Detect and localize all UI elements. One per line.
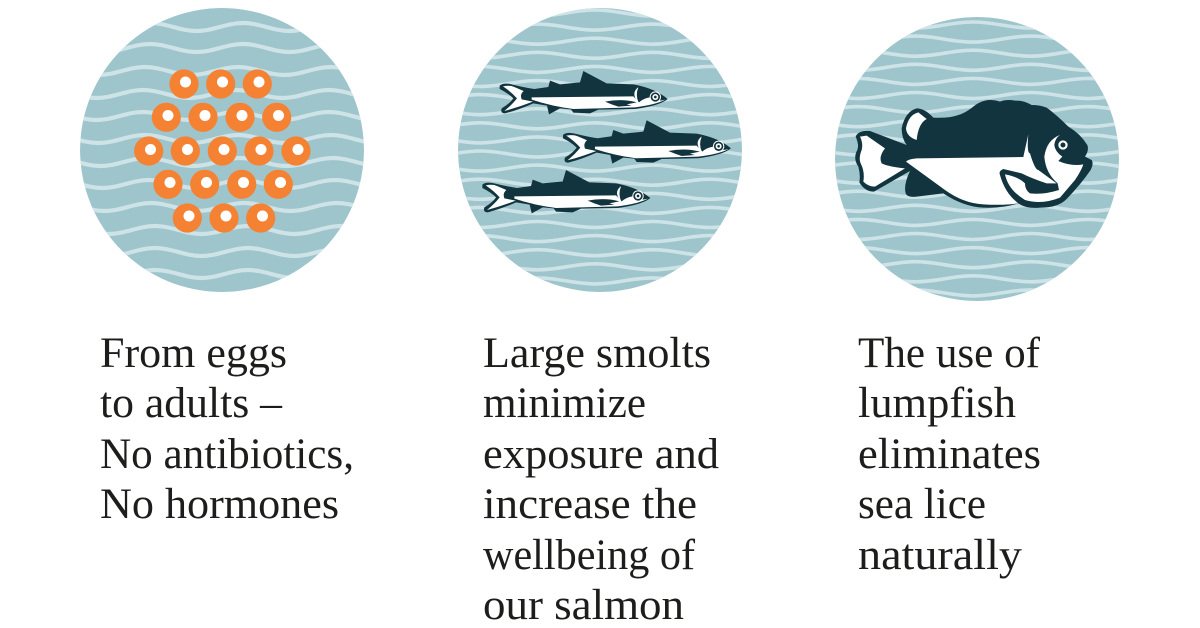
water circle: smolts [458, 8, 742, 292]
text: eggs caption: No hormones [100, 481, 339, 528]
text: smolts caption: wellbeing of [483, 532, 696, 579]
text: lumpfish caption [858, 330, 1041, 579]
text: smolts caption: exposure and [483, 431, 719, 478]
icon: middle smolt [563, 120, 731, 164]
icon: lumpfish [855, 100, 1093, 208]
text: eggs caption: From eggs [100, 330, 287, 377]
text: smolts caption: our salmon [483, 582, 684, 628]
water circle: eggs [80, 8, 364, 292]
text: smolts caption: minimize [483, 380, 646, 427]
text: smolts caption: Large smolts [483, 330, 711, 377]
icon: top smolt [500, 71, 668, 114]
panel: smolts badge [458, 8, 742, 292]
water circle: lumpfish [835, 17, 1119, 301]
text: eggs caption [100, 330, 354, 528]
text: smolts caption: increase the [483, 481, 697, 528]
text: lumpfish caption: lumpfish [858, 380, 1016, 427]
icon: salmon eggs cluster [134, 69, 311, 233]
icon: bottom smolt [482, 170, 650, 213]
text: eggs caption: to adults – [100, 380, 282, 427]
panel: eggs badge [80, 8, 364, 292]
text: smolts caption [483, 330, 719, 628]
text: lumpfish caption: eliminates [858, 431, 1041, 478]
text: lumpfish caption: naturally [858, 532, 1023, 579]
text: eggs caption: No antibiotics, [100, 431, 354, 478]
text: lumpfish caption: The use of [858, 330, 1041, 377]
panel: lumpfish badge [835, 17, 1119, 301]
text: lumpfish caption: sea lice [858, 481, 986, 528]
